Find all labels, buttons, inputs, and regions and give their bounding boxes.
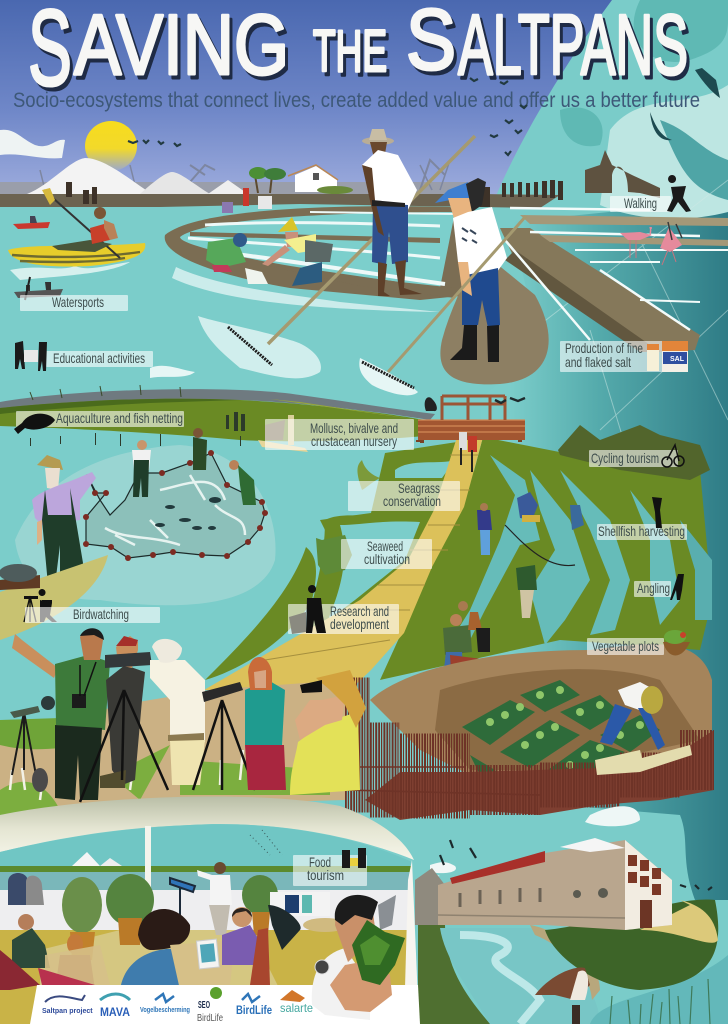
man with hat	[362, 129, 422, 296]
small red kayak	[13, 216, 50, 229]
pool in front of building	[440, 928, 600, 1024]
icon: vegetable basket	[663, 630, 690, 656]
icon: shellfish harvester	[652, 497, 662, 528]
icon: walker	[667, 175, 691, 212]
potted plants	[62, 874, 278, 960]
icon: researcher	[289, 585, 326, 634]
title: AVING	[74, 0, 289, 93]
title	[28, 0, 688, 108]
large birds	[650, 68, 720, 140]
cloud near fence	[585, 806, 640, 826]
floor	[0, 930, 410, 1024]
rake pole man	[228, 136, 475, 365]
label: seaweed: cultivation	[364, 551, 410, 567]
woman purple	[222, 907, 270, 985]
tripod and scope center	[193, 682, 255, 790]
vegetable beds	[462, 680, 660, 790]
label: vegetable plots: Vegetable plots	[592, 638, 659, 654]
reeds in channel	[610, 979, 710, 1024]
tripod left small with small birdwatcher	[10, 696, 55, 792]
label: production of salt: and flaked salt	[565, 354, 631, 370]
right bank diagonal	[500, 208, 728, 352]
diner red sweater	[55, 934, 95, 990]
people far on bank	[222, 188, 272, 213]
table with tablet	[170, 939, 235, 990]
wooden pier	[418, 396, 525, 445]
family and cow	[442, 601, 490, 700]
seagrass icon	[357, 460, 380, 490]
logo strip	[30, 985, 420, 1024]
white table	[24, 350, 38, 362]
woman with dark hair and blue top	[120, 909, 190, 990]
label: watersports	[20, 294, 128, 311]
man with white hat	[150, 639, 205, 785]
guide in green	[12, 628, 110, 800]
label: seaweed: Seaweed	[367, 538, 403, 554]
title: THE	[313, 19, 387, 84]
label: angling	[634, 580, 671, 597]
label: watersports: Watersports	[52, 294, 104, 310]
icon: birdwatcher	[24, 589, 57, 622]
sun	[85, 121, 137, 171]
island under woman	[440, 250, 549, 384]
sofa cushions	[270, 892, 330, 916]
table center	[45, 945, 110, 990]
seedlings	[486, 686, 644, 769]
label: mollusc: crustacean nursery	[311, 433, 397, 449]
icon: cyclist	[662, 445, 684, 467]
logo: vogelbescherming	[140, 994, 190, 1014]
mollusc nursery icon	[258, 415, 308, 452]
cream rug	[40, 930, 280, 990]
label: cycling: Cycling tourism	[591, 450, 659, 466]
woman yellow hat and child	[206, 217, 333, 286]
map globe background	[420, 0, 728, 1024]
label: research	[288, 603, 399, 634]
yellow boardwalk path	[204, 437, 483, 690]
black chair	[268, 905, 301, 950]
walkers silhouettes	[66, 180, 563, 207]
water channel	[590, 955, 728, 1024]
silhouettes on wetland	[30, 412, 245, 446]
woman yellow with binoculars	[290, 670, 366, 795]
chef with seaweed	[312, 895, 405, 1020]
label: walking: Walking	[624, 195, 657, 211]
woman teal	[245, 657, 286, 790]
white reeds foreground	[10, 750, 282, 800]
rake pole woman	[362, 216, 526, 388]
logo: saltpan project: Saltpan project	[42, 1008, 93, 1015]
cyclists on path	[459, 432, 477, 472]
flying birds over building	[440, 840, 712, 890]
logo: mava	[100, 994, 130, 1019]
logo: salarte: salarte	[280, 1001, 313, 1015]
net fisherman in white	[132, 440, 151, 497]
big tripod	[80, 690, 168, 802]
logo: mava: MAVA	[100, 1005, 130, 1019]
logo: saltpan project	[42, 995, 93, 1015]
logo: seo birdlife	[197, 987, 223, 1024]
background sky	[0, 0, 728, 200]
veg plot walls	[595, 745, 692, 775]
clouds left	[0, 130, 65, 158]
label: mollusc: Mollusc, bivalve and	[310, 420, 398, 436]
gardener	[600, 682, 665, 750]
tan bank	[530, 925, 600, 1000]
white frame post right	[404, 860, 419, 1024]
salt piles	[27, 158, 248, 194]
big fisherman	[32, 455, 96, 585]
diner woman left	[0, 914, 50, 990]
icon: food tourism diners	[342, 848, 366, 868]
olive strips around yellow path	[205, 440, 480, 680]
harvesters and anglers	[477, 492, 584, 618]
gray outbuilding	[415, 868, 445, 925]
logo: seo birdlife: BirdLife	[197, 1013, 223, 1024]
terrace white wall	[0, 890, 410, 932]
reeds dark trees	[558, 425, 710, 480]
gate silhouette	[585, 150, 660, 198]
distant cranes and horizon	[0, 160, 480, 194]
man with red cap	[100, 636, 145, 788]
label: shellfish: Shellfish harvesting	[598, 523, 685, 539]
icon: salt packages: SAL	[670, 356, 685, 363]
label: vegetable plots	[587, 638, 664, 655]
pale halo behind net	[15, 445, 276, 605]
palm trees and farmhouse	[249, 165, 353, 194]
label: aquaculture	[16, 410, 184, 427]
table right	[303, 918, 347, 932]
green island	[545, 899, 718, 990]
icon: salt packages	[647, 341, 688, 372]
person on pier	[425, 397, 437, 411]
label: production of salt: Production of fine	[565, 340, 643, 356]
right wetland strips	[380, 437, 712, 680]
earth embankment horizon	[0, 194, 560, 208]
watersports boat icon	[14, 277, 63, 300]
label: seagrass	[348, 480, 460, 511]
osprey	[535, 967, 590, 1024]
woman with cap	[435, 178, 507, 362]
net fisherman bending	[229, 460, 256, 505]
telescope on terrace	[170, 878, 195, 920]
seaweed icon	[316, 535, 352, 575]
net fisherman far	[193, 428, 207, 470]
logo: birdlife: BirdLife	[236, 1003, 272, 1017]
label: birdwatching	[25, 606, 160, 623]
label: educational activities	[46, 350, 153, 367]
label: research: development	[330, 616, 389, 632]
terrace view water	[0, 824, 412, 892]
label: birdwatching: Birdwatching	[73, 606, 129, 622]
flamingos	[620, 222, 682, 265]
icon: educators	[15, 341, 47, 371]
label: educational activities: Educational activities	[53, 350, 145, 366]
icon: fish	[14, 414, 55, 434]
birdwatcher foreground ground	[0, 680, 345, 815]
label: food tourism	[293, 854, 367, 886]
label: mollusc	[265, 419, 414, 450]
label: aquaculture: Aquaculture and fish netting	[56, 410, 183, 426]
logo: vogelbescherming: Vogelbescherming	[140, 1007, 190, 1014]
roof canopy	[0, 796, 414, 860]
label: food tourism: Food	[309, 854, 331, 870]
saltpan bank	[165, 206, 480, 300]
label: production of salt	[560, 340, 687, 372]
label: research: Research and	[330, 603, 389, 619]
pale river stripes	[460, 935, 540, 1024]
pink chair	[38, 968, 95, 990]
flying birds	[128, 78, 527, 155]
label: food tourism: tourism	[307, 867, 344, 883]
birds by pier	[495, 398, 525, 403]
terrace post	[145, 826, 151, 892]
left bank green	[418, 925, 490, 1024]
logo: seo birdlife: SEO	[198, 1000, 210, 1011]
boat with catch	[0, 555, 108, 640]
waiter with arm out	[197, 862, 232, 935]
logo: salarte	[280, 990, 313, 1015]
fishing net	[83, 450, 268, 561]
label: angling: Angling	[637, 580, 670, 596]
green wetland band	[0, 385, 435, 441]
couple on wall	[8, 873, 44, 905]
saltworks building	[438, 838, 672, 930]
telescope	[105, 652, 152, 668]
label: seaweed	[341, 538, 432, 569]
logo: birdlife	[236, 994, 272, 1017]
clouds	[418, 862, 456, 880]
icon: angler	[670, 574, 684, 600]
kayaker with yellow boat	[8, 188, 145, 267]
reed fence	[345, 730, 714, 820]
label: seagrass: conservation	[383, 493, 441, 509]
white foam patches	[10, 262, 440, 395]
label: seagrass: Seagrass	[398, 480, 440, 496]
brown vegetable plot land	[370, 644, 712, 780]
label: shellfish	[597, 523, 687, 540]
